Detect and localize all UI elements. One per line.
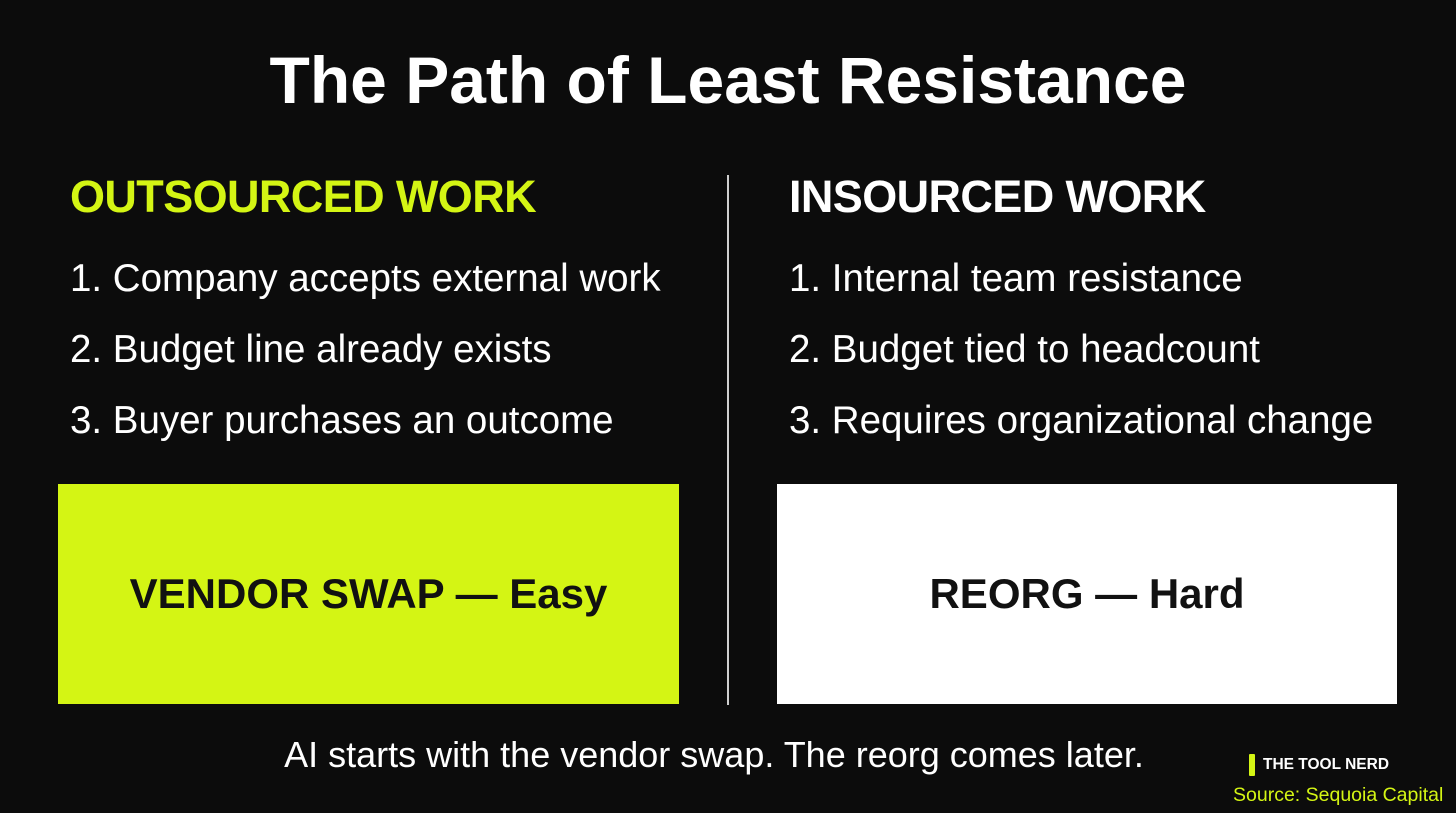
brand text: THE TOOL NERD	[1263, 756, 1389, 773]
divider	[727, 175, 729, 705]
list: insourced steps	[789, 257, 1373, 442]
list: outsourced steps: 2. Budget line already exists	[70, 328, 552, 371]
heading: insourced work: INSOURCED WORK	[789, 171, 1206, 222]
title: The Path of Least Resistance	[270, 43, 1186, 117]
list: outsourced steps: 1. Company accepts external work	[70, 257, 661, 300]
icon: lime bar	[1249, 754, 1255, 776]
panel: outsourced work	[58, 171, 679, 704]
heading: outsourced work: OUTSOURCED WORK	[70, 171, 536, 222]
footer caption: AI starts with the vendor swap. The reorg comes later.	[284, 734, 1144, 775]
box: reorg hard: REORG — Hard	[929, 570, 1245, 617]
panel: insourced work	[777, 171, 1397, 704]
box: vendor swap easy: VENDOR SWAP — Easy	[130, 570, 607, 617]
brand: the tool nerd	[1249, 754, 1389, 776]
list: outsourced steps: 3. Buyer purchases an outcome	[70, 399, 614, 442]
source: Source: Sequoia Capital	[1233, 784, 1443, 806]
list: insourced steps: 2. Budget tied to headcount	[789, 328, 1260, 371]
box: vendor swap easy	[58, 484, 679, 704]
box: reorg hard	[777, 484, 1397, 704]
list: insourced steps: 1. Internal team resistance	[789, 257, 1243, 300]
list: insourced steps: 3. Requires organizational change	[789, 399, 1373, 442]
list: outsourced steps	[70, 257, 661, 442]
